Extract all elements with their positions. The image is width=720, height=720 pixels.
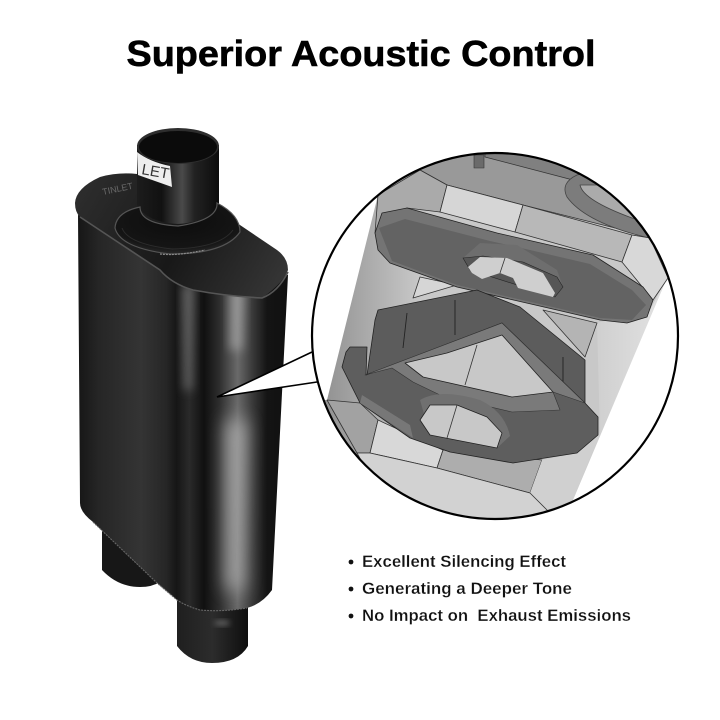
lower edge ridge	[360, 395, 413, 438]
feature list	[349, 553, 631, 625]
triangle frame	[365, 323, 585, 412]
embossed cap text: TINLET	[101, 181, 134, 197]
small tab	[474, 155, 484, 168]
bullet: emissions: No Impact on Exhaust Emissions	[362, 607, 631, 625]
triangle opening	[405, 335, 553, 397]
muffler top cap	[75, 173, 288, 298]
title: Superior Acoustic Control	[126, 33, 596, 74]
bullet: tone: Generating a Deeper Tone	[362, 580, 572, 598]
muffler product illustration	[75, 128, 288, 663]
tube right strip	[573, 286, 664, 500]
tube interior	[324, 173, 664, 510]
triangular wall	[367, 290, 585, 403]
flange around inlet	[115, 203, 240, 254]
callout pointer wedge	[217, 352, 317, 397]
lower baffle hole	[420, 394, 510, 448]
inlet pipe	[137, 128, 219, 224]
upper baffle plate	[375, 208, 653, 323]
front outlet pipe	[177, 600, 248, 663]
magnified detail circle	[312, 150, 678, 530]
inlet label: LET	[140, 161, 170, 183]
middle tube cells	[413, 277, 597, 357]
upper band shade	[484, 154, 578, 180]
upper band	[421, 154, 616, 229]
lower tube cells	[326, 400, 574, 518]
muffler body	[78, 215, 288, 611]
rear outlet pipe	[102, 525, 160, 587]
bullet: silencing: Excellent Silencing Effect	[362, 553, 567, 571]
upper ring	[564, 174, 648, 238]
lower baffle plate	[342, 323, 598, 463]
upper tube cells	[375, 170, 668, 300]
upper baffle hole	[463, 243, 563, 297]
